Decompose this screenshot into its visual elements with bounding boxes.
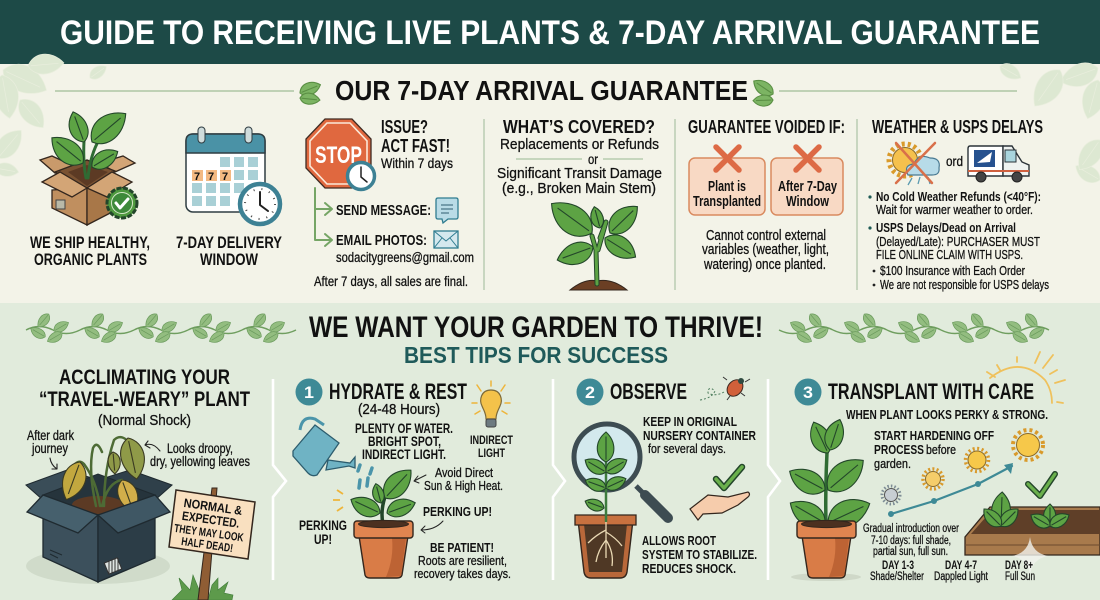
label: ord: ord	[946, 153, 963, 169]
heading: HYDRATE & REST	[329, 379, 467, 404]
contact: email photos: EMAIL PHOTOS:	[336, 232, 427, 249]
heading text: OUR 7-DAY ARRIVAL GUARANTEE	[335, 75, 748, 106]
instructions: INDIRECT LIGHT.	[362, 447, 446, 462]
bullet list	[868, 189, 1049, 292]
note: perking up left	[299, 518, 347, 547]
icon: dark box with droopy plant	[26, 435, 172, 584]
caption: WE SHIP HEALTHY,	[30, 234, 150, 252]
heading: OBSERVE	[610, 379, 687, 404]
heading	[39, 366, 250, 429]
panel: delivery window	[176, 127, 282, 269]
top section background	[0, 63, 1100, 303]
note text: Cannot control external	[706, 228, 826, 244]
heading: GUARANTEE VOIDED IF:	[688, 117, 845, 137]
sign: normal and expected: THEY MAY LOOK	[173, 523, 245, 545]
note: allows root system: ALLOWS ROOT	[642, 533, 716, 548]
note: be patient: BE PATIENT!	[430, 540, 494, 555]
step badge 3	[794, 378, 822, 406]
header banner	[0, 0, 1100, 64]
contact: send message: SEND MESSAGE:	[336, 202, 431, 219]
icon: raised garden bed	[965, 492, 1100, 555]
note: after dark journey: After dark	[27, 428, 74, 443]
note: droopy leaves: Looks droopy,	[167, 441, 233, 456]
icon: strong plant in pot	[784, 417, 875, 581]
note: droopy leaves: dry, yellowing leaves	[150, 454, 250, 469]
step badge 3: 3	[803, 383, 813, 402]
heading text: Within 7 days	[381, 155, 453, 171]
caption: WINDOW	[200, 251, 258, 269]
panel: issue act fast	[306, 117, 474, 289]
icon: stop sign with clock: STOP	[315, 142, 362, 169]
note: allows root system: SYSTEM TO STABILIZE.	[642, 547, 757, 562]
card: after 7-day window	[771, 147, 843, 215]
note: after dark journey: journey	[31, 441, 68, 456]
bullet list: USPS Delays/Dead on Arrival	[876, 220, 1016, 235]
icon: usps truck	[968, 146, 1029, 182]
note text	[702, 228, 829, 273]
instructions: START HARDENING OFF	[874, 428, 994, 443]
step badge 2	[576, 378, 604, 406]
decorative pale leaves left	[0, 52, 109, 178]
icon: broken plant	[543, 193, 644, 290]
subheading: BEST TIPS FOR SUCCESS	[404, 342, 668, 368]
panel: acclimating	[26, 366, 255, 600]
panel: healthy plants	[30, 104, 150, 269]
schedule: day 4-7	[934, 560, 989, 583]
heading: (24-48 Hours)	[358, 401, 440, 418]
panel: step 1 hydrate and rest	[293, 378, 514, 581]
caption	[176, 234, 282, 269]
panel: what's covered	[497, 117, 662, 290]
caption: ORGANIC PLANTS	[34, 251, 147, 269]
heading: WHAT’S COVERED?	[503, 117, 655, 137]
heading: “TRAVEL-WEARY” PLANT	[39, 388, 250, 411]
body text: (e.g., Broken Main Stem)	[502, 180, 656, 197]
icon: open hand	[690, 492, 750, 520]
schedule: day 4-7: DAY 4-7	[945, 560, 977, 572]
icon: stop sign with clock	[306, 119, 374, 190]
schedule: day 8+	[1005, 560, 1035, 583]
note text: variables (weather, light,	[702, 242, 829, 258]
label: indirect light	[470, 433, 514, 460]
card: after 7-day window: After 7-Day	[778, 179, 837, 195]
lower section background	[0, 303, 1100, 600]
section heading: thrive	[309, 311, 763, 368]
schedule: day 4-7: Dappled Light	[934, 571, 989, 583]
label: indirect light: LIGHT	[478, 446, 505, 460]
bullet list: FILE ONLINE CLAIM WITH USPS.	[876, 247, 1023, 262]
note: allows root system	[642, 533, 757, 576]
sign: normal and expected: HALF DEAD!	[181, 536, 234, 555]
instructions: NURSERY CONTAINER	[643, 428, 756, 443]
note: gradual introduction	[863, 523, 959, 558]
instructions: BRIGHT SPOT,	[368, 434, 441, 449]
note: final sale: After 7 days, all sales are final.	[314, 273, 468, 289]
label: indirect light: INDIRECT	[470, 433, 514, 447]
instructions	[874, 428, 994, 471]
body text	[497, 136, 662, 197]
schedule: day 1-3: DAY 1-3	[882, 560, 914, 572]
note: be patient: recovery takes days.	[414, 566, 511, 581]
note: gradual introduction: partial sun, full sun.	[873, 546, 948, 558]
bullet list: (Delayed/Late): PURCHASER MUST	[876, 234, 1040, 249]
vine left	[26, 311, 296, 346]
icon: magnifying glass with plant	[574, 424, 668, 522]
instructions: for several days.	[648, 441, 726, 456]
icon: calendar with clock: 7	[194, 171, 200, 183]
icon: calendar with clock: 7	[208, 171, 214, 183]
note: gradual introduction: 7-10 days: full shade,	[871, 535, 951, 547]
instructions	[643, 414, 756, 456]
instructions: PROCESS	[874, 442, 924, 457]
schedule: day 8+: Full Sun	[1005, 571, 1035, 583]
vine right	[779, 311, 1049, 346]
schedule: day 1-3	[870, 560, 924, 583]
note: be patient: Roots are resilient,	[418, 553, 507, 568]
arrows: contact steps	[315, 188, 332, 246]
heading text: ACT FAST!	[381, 136, 450, 156]
caption	[30, 234, 150, 269]
icon: plant in box	[40, 104, 137, 225]
icon: check mark	[1028, 474, 1055, 496]
icon: pot with roots	[575, 515, 636, 578]
section heading: thrive: WE WANT YOUR GARDEN TO THRIVE!	[309, 311, 763, 344]
sign: normal and expected: NORMAL &	[183, 496, 243, 518]
card: plant is transplanted: Transplanted	[693, 194, 761, 210]
heading: (Normal Shock)	[98, 412, 191, 429]
contact: email photos	[336, 231, 474, 265]
sign: normal and expected	[169, 488, 255, 600]
note: perking up right	[421, 504, 492, 533]
bullet list: Wait for warmer weather to order.	[876, 202, 1033, 217]
body text: or	[588, 152, 598, 167]
card: plant is transplanted	[689, 147, 765, 215]
bullet list: No Cold Weather Refunds (<40°F):	[876, 189, 1041, 204]
body text: Significant Transit Damage	[497, 165, 662, 182]
section heading: guarantee	[55, 75, 1017, 107]
icon: hardening-off suns	[882, 430, 1043, 504]
schedule: day 1-3: Shade/Shelter	[870, 571, 924, 583]
icon: message bubble	[436, 198, 458, 223]
panel: step 3 transplant	[784, 352, 1100, 583]
icon: light bulb	[472, 381, 510, 427]
bullet list: $100 Insurance with Each Order	[880, 264, 1025, 278]
subheading: WHEN PLANT LOOKS PERKY & STRONG.	[846, 407, 1048, 422]
card: plant is transplanted: Plant is	[708, 179, 746, 195]
note: perking up left: UP!	[314, 532, 332, 547]
note: perking up left: PERKING	[299, 518, 347, 533]
heading: ACCLIMATING YOUR	[59, 366, 230, 389]
note: be patient	[414, 540, 511, 581]
arrow: rising light exposure	[888, 463, 1013, 517]
note: allows root system: REDUCES SHOCK.	[642, 561, 736, 576]
card: after 7-day window: Window	[786, 194, 830, 210]
note: perking up right: PERKING UP!	[423, 504, 492, 519]
heading: TRANSPLANT WITH CARE	[828, 379, 1034, 404]
note: avoid direct sun: Sun & High Heat.	[424, 478, 503, 493]
note: after dark journey	[27, 428, 74, 469]
note text: watering) once planted.	[703, 257, 826, 273]
icon: envelope	[434, 231, 458, 248]
instructions: PLENTY OF WATER.	[355, 421, 453, 436]
instructions: garden.	[874, 456, 911, 471]
icon: watering can	[293, 418, 372, 488]
step badge 1	[296, 378, 322, 406]
email address: sodacitygreens@gmail.com	[336, 250, 474, 265]
icon: perking plant in pot	[333, 463, 418, 578]
watermark sparkle	[1012, 537, 1048, 575]
icon: right leaf	[750, 76, 776, 107]
panel: weather and usps	[868, 117, 1049, 292]
instructions	[355, 421, 453, 462]
step badge 2: 2	[585, 383, 595, 402]
instructions: KEEP IN ORIGINAL	[643, 414, 737, 429]
icon: check mark	[716, 467, 742, 488]
panel: step 2 observe	[574, 377, 757, 578]
heading text	[381, 117, 453, 171]
icon: ladybug with trail	[700, 377, 750, 400]
caption: 7-DAY DELIVERY	[176, 234, 282, 252]
contact: send message	[336, 198, 458, 223]
sign: normal and expected: EXPECTED.	[181, 509, 240, 531]
icon: left leaf	[298, 79, 323, 105]
note: gradual introduction: Gradual introduction over	[863, 523, 959, 535]
bullet list: We are not responsible for USPS delays	[880, 278, 1049, 292]
heading	[329, 379, 467, 418]
body text: Replacements or Refunds	[500, 136, 659, 153]
note: avoid direct sun: Avoid Direct	[435, 465, 493, 480]
instructions: before	[926, 442, 956, 457]
heading text: ISSUE?	[381, 117, 428, 137]
schedule: day 8+: DAY 8+	[1005, 560, 1033, 572]
step badge 1: 1	[304, 383, 314, 402]
note: droopy leaves	[145, 441, 250, 469]
decorative pale leaves right	[997, 58, 1100, 187]
icon: calendar with clock: 7	[222, 171, 228, 183]
icon: calendar with clock	[186, 127, 280, 224]
icon: crossed-out weather	[889, 143, 939, 185]
panel: guarantee voided	[688, 117, 845, 273]
note: avoid direct sun	[414, 465, 503, 493]
icon: sun arc	[987, 352, 1065, 403]
